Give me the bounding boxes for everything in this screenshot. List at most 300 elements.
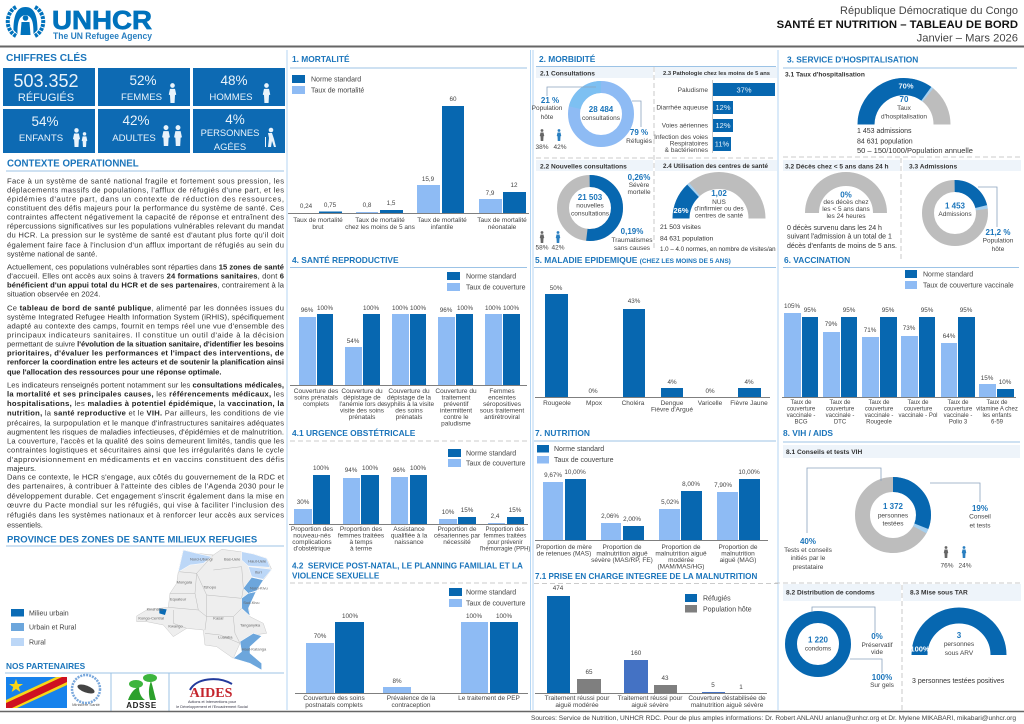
panel 3.1: taux d'hospitalisation: 70% [898, 82, 914, 90]
panel: partner logos [6, 673, 248, 711]
panel 2.4: utilisation des centres: 84 631 population [660, 236, 713, 242]
panel 2.2: nouvelles consultations: mortelle [627, 189, 651, 196]
bar chart: prénatals [396, 414, 423, 421]
bar chart: prénatals [349, 414, 376, 421]
panel 2.2: nouvelles consultations: sans causes [614, 245, 651, 252]
bar chart: dépistage de [343, 394, 381, 402]
bar chart: couverture [826, 406, 855, 412]
panel 8.2: condoms [783, 584, 901, 689]
legend: Taux de couverture vaccinale [923, 282, 1014, 290]
bar chart: Couverture du [388, 388, 430, 395]
bar chart: 100% [363, 305, 379, 312]
bar chart: malnutrition aiguë [596, 550, 648, 558]
panel 8.2: condoms: Sur gels [870, 682, 895, 689]
panel 3.2: décès: décès d'enfants de moins de 5 ans. [787, 243, 897, 250]
panel 3.3: admissions: Population [983, 238, 1014, 244]
legend [292, 75, 364, 94]
panel 8.1: conseils et tests: et tests [970, 522, 991, 530]
legend: Norme standard [554, 446, 604, 453]
panel 3.1: taux d'hospitalisation: 1 453 admissions [857, 128, 912, 135]
panel 2.2: nouvelles consultations: 0,26% [628, 173, 650, 182]
map: DRC provinces: Haut-Katanga [242, 647, 267, 652]
bar chart: Paludisme [678, 87, 708, 94]
bar chart: antirétroviral [484, 414, 520, 421]
donut chart: 1 220 [808, 636, 829, 644]
bar chart: sous traitement [480, 408, 524, 414]
panel 8.1: conseils et tests: Conseil [969, 514, 991, 520]
map legend: Urbain et Rural [29, 624, 77, 632]
legend: Norme standard [311, 76, 361, 84]
text block: contexte opérationnel: La couverture, l'accès et la qualité des soins demeurent limités, tandis que les [7, 437, 284, 446]
panel 8.1: conseils et tests: initiés par le [791, 555, 826, 562]
bar chart [535, 285, 770, 414]
panel 3.1: taux d'hospitalisation [785, 72, 973, 155]
panel 2.1: consultations: 79 % [630, 128, 648, 137]
panel 2.2: nouvelles consultations: 2.2 Nouvelles consultations [540, 164, 627, 170]
bar chart: 15% [509, 507, 522, 514]
map: DRC provinces: Sud-Kivu [243, 600, 259, 605]
text block: contexte opérationnel: contraintes affectent négativement la capacité de réponse et entraînent des [7, 213, 284, 222]
bar chart [295, 613, 528, 709]
panel 2.4: utilisation des centres: centres de santé [695, 212, 743, 220]
bar chart: contraception [391, 702, 431, 709]
logo: AIDES: Actions et Interventions pour [188, 700, 237, 704]
text block: contexte opérationnel: d'accueil. Elles ont accès aux soins à travers 24 formations sanitaires, dont 6 [7, 272, 284, 281]
bar chart: vaccinale - [944, 413, 972, 419]
icon: gender split: 58% [535, 244, 549, 252]
bar chart: 105% [784, 303, 800, 310]
panel 3.1: taux d'hospitalisation: 70 [900, 95, 909, 104]
bar chart: vaccinale - [826, 413, 854, 419]
text block: contexte opérationnel: système Integrated Refugee Health Information System (iRHIS), spécifiquement [7, 312, 285, 321]
panel 8.3: mise sous TAR: 100% [910, 644, 930, 654]
map: DRC provinces: Kwango [168, 623, 183, 628]
panel 2.4: utilisation des centres: 26% [673, 206, 689, 215]
legend: Taux de couverture [466, 284, 526, 292]
bar chart: Traitement réussi pour [618, 695, 683, 702]
panel 2.1: consultations: 2.1 Consultations [540, 70, 595, 78]
text block: contexte opérationnel: Les indicateurs renseignés portent notamment sur les consultations médicales, [7, 381, 284, 390]
bar chart: contre le [444, 414, 469, 421]
panel: key figures: 52% [129, 73, 157, 88]
bar chart: Proportion des [485, 527, 525, 533]
legend: Taux de couverture [554, 457, 614, 464]
bar chart: d'obstétrique [293, 546, 331, 552]
bar chart: à terme [350, 546, 372, 552]
map: DRC provinces: Haut-Uele [248, 559, 267, 564]
panel 3.1: taux d'hospitalisation: d'hospitalisation [881, 114, 927, 120]
map: DRC provinces: Bas-Uele [224, 557, 241, 562]
panel: key figures: RÉFUGIÉS [18, 91, 74, 104]
map: DRC provinces: Kinshasa [147, 607, 164, 612]
bar chart: Taux de mortalité [477, 217, 527, 224]
panel 8.3: mise sous TAR: 3 [957, 631, 962, 640]
bar chart: 54% [347, 338, 360, 345]
bar chart: 0% [705, 388, 715, 395]
panel 2.2: nouvelles consultations: 0,19% [621, 227, 643, 236]
bar chart: modérée [668, 557, 694, 564]
text block: contexte opérationnel: épidémies d'autre part, dans un contexte de réduction des ressources, [7, 195, 284, 204]
legend: Réfugiés [703, 596, 731, 602]
map legend: Milieu urbain [29, 610, 69, 618]
panel 3.1: taux d'hospitalisation: 3.1 Taux d'hospitalisation [785, 72, 865, 78]
panel: key figures: 54% [31, 114, 59, 129]
bar chart: 1,5 [387, 200, 396, 207]
panel 2.1: consultations: Réfugiés [626, 138, 653, 145]
text block: contexte opérationnel: principaux indicateurs sanitaires. Il constitue un outil d'aide à la décision [7, 331, 284, 340]
text block: contexte opérationnel: déplacements massifs de populations, l'afflux de réfugiés d'une part, et les [7, 186, 284, 195]
section 3: hospitalisation [783, 54, 1022, 262]
bar chart: Femmes [489, 388, 515, 395]
panel 2.1: consultations: 21 % [541, 96, 559, 105]
bar chart: 100% [485, 305, 501, 312]
panel: key figures: FEMMES [121, 92, 162, 103]
panel 2.4: utilisation des centres: 2.4 Utilisation des centres de santé [663, 163, 768, 170]
bar chart: 8% [392, 678, 402, 685]
bar chart: Diarrhée aqueuse [656, 104, 708, 112]
donut chart: 1 453 [945, 202, 966, 210]
bar chart: 160 [631, 650, 642, 657]
panel 3.2: décès: suivant l'admission à un total de 1 [787, 234, 892, 240]
icon: gender split: 76% [940, 562, 954, 570]
panel 3.2: décès: 0% [840, 190, 852, 200]
text block: contexte opérationnel: Ce tableau de bord de santé publique, alimenté par les données issues du [7, 303, 284, 312]
heading: 7.1 PRISE EN CHARGE INTEGREE DE LA MALNUTRITION [535, 572, 757, 581]
bar chart: 15,9 [422, 176, 435, 183]
bar chart: 8,00% [682, 481, 700, 488]
panel: key figures: PERSONNES [201, 127, 259, 138]
title block: SANTÉ ET NUTRITION – TABLEAU DE BORD [777, 18, 1018, 31]
logo: ministry emblem [72, 675, 101, 707]
logo: UNHCR [8, 5, 152, 41]
map: DRC provinces: Nord-Ubangi [190, 557, 213, 562]
bar chart: complications [292, 539, 332, 546]
icon: gender split [535, 129, 567, 151]
bar chart: 7,9 [486, 190, 495, 197]
text block: contexte opérationnel: réfugiés dans les systèmes nationaux et à renforcer leur accès aux services [7, 511, 284, 520]
bar chart: 79% [825, 321, 838, 328]
panel 8.2: condoms: 8.2 Distribution de condoms [786, 590, 875, 596]
icon: children [73, 128, 87, 147]
text block: contexte opérationnel: augmentent les risques de maladies infectieuses, d'épidémies et de malnutrition. [7, 427, 284, 436]
donut chart: consultations [582, 115, 621, 122]
bar chart: Assistance [393, 526, 425, 533]
bar chart: Couverture des [294, 388, 339, 395]
text block: contexte opérationnel: essentiels. [7, 521, 43, 530]
panel 8.2: condoms: vide [871, 649, 883, 656]
heading: 3. SERVICE D'HOSPITALISATION [787, 54, 918, 64]
panel 3.2: décès: des décès chez [823, 199, 869, 206]
section 8: VIH / AIDS [775, 428, 1022, 710]
panel 2.1: consultations: Population [532, 105, 563, 112]
legend [905, 270, 1014, 290]
icon: UNHCR emblem [8, 7, 43, 36]
heading: 1. MORTALITÉ [292, 53, 350, 64]
bar chart: 60 [449, 96, 457, 103]
bar chart: couverture [944, 406, 973, 412]
bar chart: 100% [503, 305, 519, 312]
legend [537, 445, 614, 464]
section 2: morbidité [532, 53, 777, 253]
bar chart: 5 [711, 682, 715, 689]
text block: contexte opérationnel: renforcer la coordination entre les acteurs et de soutenir la planification ainsi [7, 358, 284, 367]
legend: Taux de couverture [466, 460, 526, 468]
text block: contexte opérationnel: situation observée en 2024. [7, 290, 100, 299]
panel 3.1: taux d'hospitalisation: 84 631 population [857, 138, 913, 146]
icon: gender split: 42% [553, 144, 567, 151]
panel 2.2: nouvelles consultations: Sévère [629, 182, 650, 189]
bar chart: les enfants [982, 413, 1012, 419]
bar chart: & bactériennes [665, 147, 709, 154]
bar chart [535, 469, 768, 570]
map: DRC provinces: Tanganyika [240, 623, 261, 628]
bar chart: 100% [317, 305, 333, 312]
panel 3.3: admissions [903, 160, 1021, 253]
panel 2.2: nouvelles consultations [535, 160, 653, 252]
bar chart: 4% [744, 379, 754, 386]
map: DRC provinces: Kongo-Central [138, 615, 164, 620]
donut chart: Admissions [938, 211, 972, 218]
heading: 2. MORBIDITÉ [539, 53, 596, 64]
bar chart: Proportion de [661, 544, 701, 551]
title block: République Démocratique du Congo [840, 5, 1018, 17]
bar chart [290, 305, 527, 428]
bar chart: 95% [960, 307, 973, 314]
bar chart: brut [312, 224, 324, 231]
bar chart: 10,00% [564, 469, 586, 476]
bar chart: DTC [834, 420, 847, 426]
text block: contexte opérationnel: œuvre du Pacte mondial sur les réfugiés, qui vise à faciliter l'inclusion des [7, 501, 284, 510]
panel 8.2: condoms: Préservatif [861, 642, 893, 649]
panel 8.2: condoms: 0% [871, 632, 883, 641]
panel 8.3: mise sous TAR [903, 584, 1021, 685]
bar chart: 96% [301, 307, 314, 314]
logo: ministry emblem: Ministère Santé [72, 702, 101, 707]
text block: contexte opérationnel: nutrition, la santé reproductive et le VIH. Par ailleurs, les conditions de vie [7, 408, 284, 417]
bar chart: Taux de [868, 400, 890, 406]
text block: contexte opérationnel: Face à un système de santé national fragile et fortement sous pression, les [7, 177, 284, 186]
bar chart: 15% [981, 375, 994, 382]
title block [777, 5, 1018, 44]
bar chart: Rougeole [543, 400, 571, 407]
panel: key figures: 4% [225, 112, 245, 127]
bar chart: vitamine A chez [976, 406, 1018, 412]
bar chart: Traitement réussi pour [545, 695, 610, 702]
bar chart: vaccinale - [787, 413, 815, 419]
bar chart: 43% [628, 298, 641, 305]
bar chart: Couverture déstabilisée de [688, 695, 766, 702]
bar chart [782, 303, 1018, 426]
legend: Taux de mortalité [311, 88, 364, 94]
legend [447, 272, 526, 292]
heading: 6. VACCINATION [784, 255, 850, 265]
bar chart: intermittent [440, 408, 472, 414]
bar chart: Couverture des soins [303, 695, 365, 702]
donut chart: 28 484 [589, 105, 614, 114]
donut chart [563, 181, 617, 235]
panel: key figures: 48% [220, 73, 248, 88]
donut chart [862, 484, 924, 546]
map: DRC provinces: Mongala [177, 579, 193, 584]
bar chart: malnutrition [721, 550, 755, 558]
icon: woman [169, 83, 176, 103]
bar chart: couverture [865, 406, 894, 412]
heading: chiffres clés: CHIFFRES CLÉS [6, 51, 87, 64]
bar chart: 95% [882, 307, 895, 314]
bar chart: 65 [585, 669, 593, 676]
panel 8.1: conseils et tests: prestataire [793, 564, 824, 571]
panel 2.1: consultations [532, 67, 653, 151]
legend: Population hôte [703, 606, 752, 614]
bar chart: sévère (MAS/RP, FE) [591, 557, 653, 564]
bar chart: nécessité [443, 539, 471, 546]
bar chart: 100% [466, 613, 482, 620]
bar chart: Rougeole [866, 420, 893, 426]
donut chart: condoms [805, 646, 832, 652]
section 1: mortalité [288, 53, 529, 231]
donut chart: personnes [878, 512, 909, 520]
bar chart: l'hémorragie (PPH) [480, 546, 530, 552]
section 4.1: urgence obstétricale [289, 427, 530, 552]
bar chart: 50% [550, 285, 563, 292]
icon: gender split [535, 231, 565, 252]
panel 2.4: utilisation des centres: NUS [712, 199, 727, 206]
bar chart: de retenues (MAS) [537, 550, 591, 558]
legend: Norme standard [466, 274, 516, 280]
bar chart: 11% [715, 140, 730, 148]
bar chart: Fièvre Jaune [730, 400, 768, 407]
bar chart: Le traitement de PEP [458, 695, 520, 702]
bar chart: enceintes [488, 394, 517, 402]
panel 8.1: conseils et tests: 8.1 Conseils et tests VIH [786, 449, 862, 456]
heading: 7. NUTRITION [535, 428, 590, 438]
panel 8.3: mise sous TAR: sous ARV [945, 650, 974, 657]
bar chart: 100% [342, 613, 358, 620]
bar chart: Taux de [986, 400, 1008, 406]
bar chart: syphilis à la visite [384, 401, 434, 408]
panel 3.1: taux d'hospitalisation: 50 – 150/1000/Population annuelle [857, 146, 973, 155]
panel 3.2: décès [783, 160, 900, 250]
bar chart: 100% [362, 465, 378, 472]
panel 3.2: décès: 0 décès survenu dans les 24 h [787, 225, 882, 232]
bar chart: 100% [410, 465, 426, 472]
panel: key figures: 503.352 [13, 71, 79, 91]
panel 8.1: conseils et tests [783, 445, 1020, 571]
legend: Norme standard [466, 590, 516, 596]
legend: Taux de couverture [466, 600, 526, 608]
bar chart: néonatale [488, 224, 517, 231]
heading: nos partenaires: NOS PARTENAIRES [6, 661, 86, 671]
bar chart: soins prénatals [294, 394, 339, 402]
bar chart: 2,06% [601, 513, 619, 520]
bar chart: l'anémie lors de [339, 401, 385, 408]
panel 3.2: décès: les 24 heures [826, 213, 866, 220]
bar chart: 10% [442, 509, 455, 516]
bar chart: Proportion de [718, 544, 758, 551]
bar chart: 37% [736, 86, 752, 94]
bar chart: femmes traitées [484, 534, 526, 540]
bar chart: 0,75 [324, 202, 337, 209]
panel 2.4: utilisation des centres [655, 160, 777, 253]
icon: gender split: 42% [551, 244, 565, 252]
bar chart: visite des soins [340, 408, 385, 414]
bar chart: malnutrition aiguë [655, 550, 707, 558]
bar chart: Taux de [907, 400, 929, 406]
section 7: nutrition [534, 428, 776, 570]
legend: Norme standard [923, 272, 973, 278]
map legend [11, 609, 77, 646]
bar chart [535, 585, 767, 709]
bar chart: Fièvre d'Argué [651, 406, 693, 414]
legend [448, 449, 526, 468]
bar chart: 7,90% [714, 482, 732, 489]
panel 2.4: utilisation des centres: 1,02 [711, 189, 727, 198]
bar chart: 70% [314, 633, 327, 640]
panel 3.2: décès: les < 5 ans dans [822, 206, 871, 213]
bar chart: Taux de [947, 400, 969, 406]
text block: contexte opérationnel: que l'allocation des ressources pour une réponse optimale. [7, 367, 222, 376]
bar chart: césariennes par [434, 532, 481, 540]
bar chart: Voies aériennes [662, 122, 709, 130]
bar chart: 6-59 [991, 420, 1004, 426]
bar chart: 2,4 [491, 513, 500, 520]
legend [685, 594, 752, 614]
bar chart: Respiratoires [670, 140, 709, 148]
bar chart [289, 465, 530, 552]
panel: key figures: AGÉES [214, 141, 246, 152]
panel 8.1: conseils et tests: 19% [972, 504, 988, 513]
bar chart: 64% [943, 333, 956, 340]
heading: VIOLENCE SEXUELLE [292, 572, 380, 580]
donut chart [568, 81, 634, 147]
bar chart: Choléra [622, 400, 645, 407]
bar chart: Varicelle [698, 400, 723, 407]
panel 8.3: mise sous TAR: personnes [944, 641, 975, 648]
wordmark: UNHCR [52, 5, 152, 35]
text block: contexte opérationnel: constituent des défis majeurs pour la performance du système de santé. Ces [7, 204, 284, 213]
panel 2.3: pathologie: 2.3 Pathologie chez les moins de 5 ans [663, 71, 770, 77]
bar chart: couverture [787, 406, 816, 412]
panel: key figures: 42% [122, 113, 150, 128]
bar chart: 9,67% [544, 472, 562, 479]
gauge chart [920, 616, 998, 655]
bar chart: 100% [457, 305, 473, 312]
bar chart: 12% [715, 103, 731, 112]
bar chart: Prévalence de la [387, 695, 436, 702]
text block: contexte opérationnel: Actuellement, ces populations vulnérables sont réparties dans 15 zones de santé [7, 262, 284, 271]
panel 3.3: admissions: hôte [992, 246, 1005, 253]
section 7.1: prise en charge [534, 572, 778, 709]
icon: gender split [940, 546, 972, 570]
legend: Norme standard [466, 450, 516, 458]
panel 8.1: conseils et tests: Tests et conseils [784, 547, 833, 554]
icon: adults [162, 125, 182, 146]
section 4.2: service post-natal [290, 562, 530, 709]
panel 2.3: pathologie [654, 67, 777, 154]
panel 2.4: utilisation des centres: 1.0 – 4.0 normes, en nombre de visites/an [660, 246, 776, 253]
gauge chart [681, 180, 757, 218]
panel: key figures [3, 68, 285, 153]
bar chart: Taux de [790, 400, 812, 406]
bar chart: nouveau-nés [293, 532, 332, 540]
bar chart: Taux de mortalité [417, 217, 467, 224]
bar chart: 10% [999, 379, 1012, 386]
donut chart: testées [883, 520, 904, 528]
text block: contexte opérationnel: adapté au contexte des camps, fournit en temps réel une vue d'ensemble des [7, 321, 284, 330]
map: DRC provinces: Lualaba [218, 634, 233, 639]
bar chart: (MAM/MAS/HG) [658, 564, 704, 570]
bar chart: Dengue [661, 400, 684, 407]
